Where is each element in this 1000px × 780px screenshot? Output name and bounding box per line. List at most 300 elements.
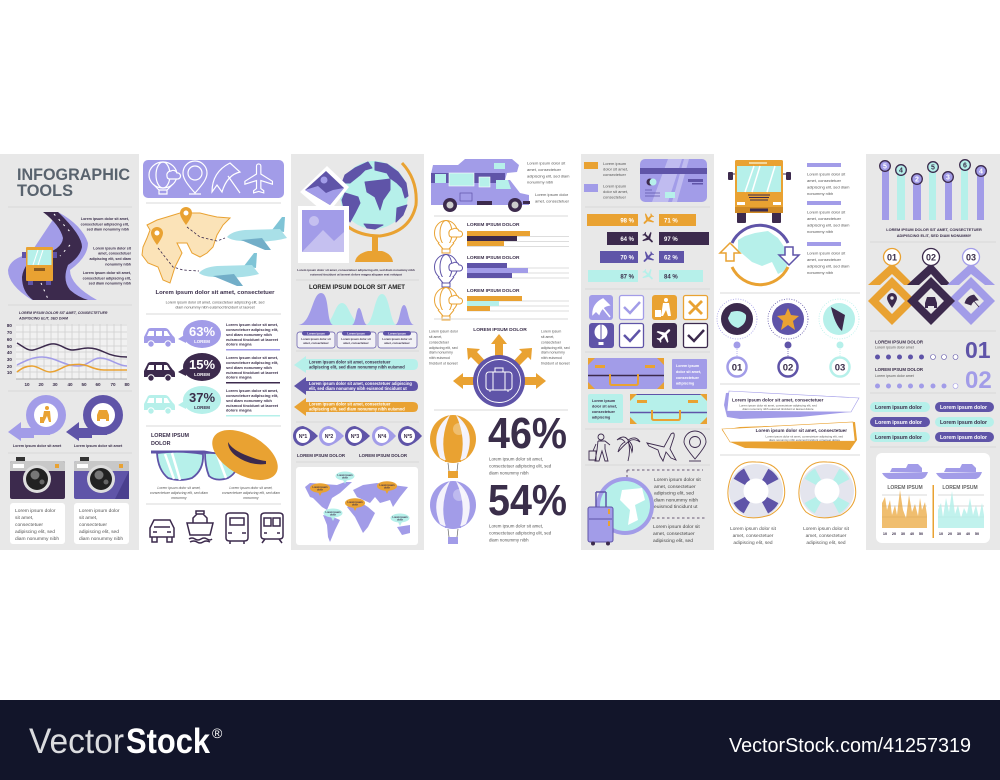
bus text: adipiscing elit, sed diam xyxy=(807,184,850,190)
card: ship charts: 30 xyxy=(957,532,961,536)
camper text: Lorem ipsum dolor sit xyxy=(527,160,566,166)
steps: numbered markers: Nº3 xyxy=(351,434,359,440)
map description: Lorem ipsum dolor sit amet, consectetuer adipiscing elit, sed xyxy=(166,300,264,304)
chart: line chart: 50 xyxy=(81,382,87,387)
row: 37 percent: LOREM xyxy=(194,405,210,410)
chart: line chart: 20 xyxy=(38,382,44,387)
progress 02: Lorem ipsum dolor amet xyxy=(875,374,914,378)
cards: peaks: amet, consectetuer xyxy=(303,341,330,345)
caption globe: euismod tincidunt ut laoreet dolore magna aliquam erat volutpat xyxy=(310,272,402,276)
icon: suitcase lavender xyxy=(588,358,664,389)
illustration: globe with cycle arrows xyxy=(720,225,799,285)
card: ship charts: 50 xyxy=(975,532,979,536)
illustration: sunglasses xyxy=(151,452,238,480)
pills: Lorem ipsum dolor xyxy=(875,405,922,411)
text box aqua xyxy=(588,394,623,423)
globe text: adipiscing elit, sed xyxy=(653,538,693,544)
camper text: nonummy nibh xyxy=(527,180,553,184)
map: world with callouts: Lorem ipsum xyxy=(379,484,395,487)
row: balloon bars 2: LOREM IPSUM DOLOR xyxy=(467,255,520,261)
side text left: sit amet, xyxy=(429,335,442,339)
map: world with callouts: dolor xyxy=(397,518,403,522)
card: ship charts: 50 xyxy=(919,532,923,536)
chart: line chart: 10 xyxy=(7,370,12,375)
row: 63 percent: LOREM xyxy=(194,339,210,344)
caption right: consectetuer adipiscing elit, sed diam xyxy=(222,491,280,495)
camper text: adipiscing elit, sed diam xyxy=(527,174,570,178)
legend: dolor sit amet, xyxy=(603,189,628,194)
footer band xyxy=(0,700,1000,780)
ribbon lavender: Lorem ipsum dolor sit amet, consectetuer adipiscing elit, sed xyxy=(739,404,817,408)
pills: Lorem ipsum dolor xyxy=(940,405,987,411)
lifebuoy text: Lorem ipsum dolor sit xyxy=(803,526,850,532)
icon tiles xyxy=(589,295,708,348)
side text right xyxy=(541,330,570,366)
caption right xyxy=(222,486,280,500)
panel: icon header xyxy=(143,160,284,198)
card: ship charts: 20 xyxy=(948,532,952,536)
row: balloon bars 3: LOREM IPSUM DOLOR xyxy=(467,288,520,294)
arrow: car xyxy=(66,395,123,448)
step 02: 02 xyxy=(783,362,793,374)
globe text: amet, consectetuer xyxy=(653,531,695,537)
icon: dark camera xyxy=(10,457,65,499)
bus text: amet, consectetuer xyxy=(807,178,842,183)
cards: peaks: Lorem ipsum dolor sit xyxy=(382,337,412,341)
chart: butterfly bars: 70 % xyxy=(620,256,635,262)
bus text: adipiscing elit, sed diam xyxy=(807,264,850,268)
steps: numbered markers: Nº2 xyxy=(325,434,333,440)
card: ship charts xyxy=(876,453,990,543)
arrow band aqua: adipiscing elit, sed diam nonummy nibh euismod xyxy=(309,364,405,370)
side text left: nibh euismod xyxy=(429,356,450,360)
map: world with callouts: Lorem ipsum xyxy=(392,516,408,519)
map: world with callouts: Lorem ipsum xyxy=(325,511,341,514)
road text blocks: adipiscing elit, sed diam xyxy=(89,257,131,261)
pills xyxy=(870,402,994,442)
chart: lollipop bars: 4 xyxy=(899,168,903,174)
row: 37 percent: sed diam nonummy nibh xyxy=(226,398,272,403)
lifebuoy text: amet, consectetuer xyxy=(806,533,847,539)
row: 37 percent: consectetuer adipiscing elit, xyxy=(226,393,278,398)
icon: lifebuoy purple xyxy=(728,462,785,518)
heading: luggage: LOREM IPSUM DOLOR xyxy=(473,327,527,333)
diagram: diamonds xyxy=(868,248,995,325)
pills: Lorem ipsum dolor xyxy=(940,435,987,441)
arrow: walker: Lorem ipsum dolor sit amet xyxy=(13,444,62,448)
footer band: ® xyxy=(212,725,223,741)
chart: butterfly bars: 64 % xyxy=(620,237,635,243)
row: 15 percent xyxy=(144,353,280,384)
text card right: consectetuer xyxy=(79,522,107,528)
heading: peaks: LOREM IPSUM DOLOR SIT AMET xyxy=(309,284,405,291)
globe text: euismod tincidunt ut xyxy=(654,504,698,510)
camper text: Lorem ipsum dolor xyxy=(535,192,569,197)
progress 01: Lorem ipsum dolor amet xyxy=(875,346,914,350)
row: balloon bars 1 xyxy=(434,220,569,253)
text box aqua: adipiscing xyxy=(592,416,610,420)
row: 15 percent: dolore magna xyxy=(226,374,252,380)
row: 37 percent xyxy=(144,386,280,416)
arrow band orange: adipiscing elit, sed diam nonummy nibh euismod xyxy=(309,406,405,412)
footer band: Vector xyxy=(29,722,124,761)
text card left: adipiscing elit, sed xyxy=(15,529,55,535)
card: ship charts: 10 xyxy=(883,532,887,536)
cards: peaks: amet, consectetuer xyxy=(343,341,370,345)
icon: plane upper xyxy=(227,217,287,250)
bus text: amet, consectetuer xyxy=(807,257,842,262)
text 46 percent: Lorem ipsum dolor sit amet, xyxy=(489,456,543,462)
cards: peaks: Lorem ipsum xyxy=(347,332,365,336)
text card right: Lorem ipsum dolor xyxy=(79,508,120,514)
text box aqua: consectetuer xyxy=(592,410,616,414)
globe text xyxy=(653,477,701,544)
road text blocks: sed diam nonummy nibh xyxy=(89,282,131,286)
camper text: amet, consectetuer xyxy=(535,198,570,204)
steps: numbered markers: Nº5 xyxy=(404,434,412,440)
progress 02: 02 xyxy=(965,367,992,394)
road text blocks: sed diam nonummy nibh xyxy=(87,228,129,232)
ribbon orange: diam nonummy nibh euismod tincidunt ut laoreet dolore xyxy=(769,438,840,442)
chart: line chart: 40 xyxy=(7,350,12,355)
progress 02 xyxy=(875,367,992,394)
chart: line chart: 30 xyxy=(7,357,12,362)
road text blocks: Lorem ipsum dolor sit amet, xyxy=(83,271,131,275)
text box aqua: dolor sit amet, xyxy=(592,404,617,408)
side text left xyxy=(429,330,459,366)
step 03 xyxy=(819,299,859,376)
lifebuoy text: adipiscing elit, sed xyxy=(806,540,846,546)
footer band: VectorStock.com/41257319 xyxy=(729,735,971,757)
steps: numbered markers: Nº4 xyxy=(378,434,386,440)
arrow band orange: Lorem ipsum dolor sit amet, consectetuer xyxy=(309,402,391,406)
icon: lifebuoy aqua xyxy=(799,462,856,518)
progress 02: LOREM IPSUM DOLOR xyxy=(875,367,924,372)
cards: peaks: Lorem ipsum xyxy=(388,332,406,336)
chart: butterfly bars: 71 % xyxy=(664,218,678,224)
camper text: amet, consectetuer xyxy=(527,167,562,172)
bus text: adipiscing elit, sed diam xyxy=(807,222,850,228)
side text right: nibh euismod xyxy=(541,356,562,360)
illustration: globe and luggage xyxy=(588,470,705,546)
ribbon orange: Lorem ipsum dolor sit amet, consectetuer adipiscing elit, sed xyxy=(766,434,843,438)
text card left: diam nonummy nibh xyxy=(15,536,59,542)
row: 37 percent: dolore magna xyxy=(226,408,252,412)
row: 37 percent: Lorem ipsum dolor sit amet, xyxy=(226,388,278,393)
panel: background strips xyxy=(0,154,1000,550)
chart: butterfly bars: 84 % xyxy=(664,274,678,280)
globe text: Lorem ipsum dolor sit xyxy=(654,477,701,483)
caption left: Lorem ipsum dolor sit amet, xyxy=(157,486,201,490)
chart: butterfly bars xyxy=(587,211,709,283)
row: 63 percent: 63% xyxy=(189,324,215,339)
steps: numbered markers: Nº1 xyxy=(299,434,307,440)
arrow band purple xyxy=(294,377,418,395)
chart: lollipop bars xyxy=(880,160,986,220)
illustration: globe on stand xyxy=(340,161,416,262)
lifebuoy text: adipiscing elit, sed xyxy=(733,540,773,546)
side text left: Lorem ipsum dolor xyxy=(429,330,459,334)
road text blocks: consectetuer adipiscing elit, xyxy=(81,222,129,226)
side text left: tincidunt ut laoreet xyxy=(429,362,458,366)
legend xyxy=(584,161,628,200)
text 54 percent: consectetuer adipiscing elit, sed xyxy=(489,530,552,536)
map: world with callouts: dolor xyxy=(317,488,323,492)
text 46 percent: diam nonummy nibh xyxy=(489,470,529,476)
map: world with callouts: dolor xyxy=(384,486,390,490)
ribbon lavender: diam nonummy nibh euismod tincidunt ut laoreet dolore xyxy=(742,407,814,411)
row: 63 percent: Lorem ipsum dolor sit amet, xyxy=(226,322,278,327)
illustration: photo tilted xyxy=(300,166,349,215)
row: 63 percent: sed diam nonummy nibh xyxy=(226,332,272,337)
progress 01 xyxy=(875,337,991,363)
caption left: consectetuer adipiscing elit, sed diam xyxy=(150,491,208,495)
number 46 percent: 46% xyxy=(488,409,567,458)
chart: line chart: 70 xyxy=(110,382,116,387)
arrow: car: Lorem ipsum dolor sit amet xyxy=(74,444,123,448)
row: 15 percent: 15% xyxy=(189,357,215,372)
card: ship charts: 40 xyxy=(966,532,970,536)
arrow band orange xyxy=(294,398,418,416)
step 01: 01 xyxy=(732,362,743,374)
steps: numbered markers: LOREM IPSUM DOLOR xyxy=(359,453,408,458)
cards: peaks: Lorem ipsum xyxy=(307,332,325,336)
number 54 percent: 54% xyxy=(488,476,567,525)
text 46 percent: consectetuer adipiscing elit, sed xyxy=(489,464,552,468)
cards: peaks: Lorem ipsum dolor sit xyxy=(301,337,331,341)
steps: numbered markers xyxy=(293,426,422,458)
illustration: bus front xyxy=(728,160,791,223)
icon: suitcase aqua xyxy=(630,394,707,424)
bars caption xyxy=(886,227,982,238)
illustration: photo front xyxy=(298,206,349,263)
text card left xyxy=(10,503,65,544)
bus text: nonummy nibh xyxy=(807,229,833,234)
row: 15 percent: consectetuer adipiscing elit, xyxy=(226,360,278,365)
chart: line chart: 60 xyxy=(95,382,101,387)
footer band: Stock xyxy=(126,722,210,761)
road text blocks: consectetuer adipiscing elit, xyxy=(83,276,131,280)
chart: lollipop bars: 5 xyxy=(883,164,887,170)
legend: Lorem ipsum xyxy=(603,184,627,188)
card: ship charts: 30 xyxy=(901,532,905,536)
card: ship charts: LOREM IPSUM xyxy=(942,485,978,491)
globe text: diam nonummy nibh xyxy=(654,498,698,504)
road text blocks: Lorem ipsum dolor sit amet, xyxy=(81,217,129,221)
diagram: diamonds: 02 xyxy=(926,252,936,262)
diagram: radial arrows and suitcase xyxy=(453,334,546,407)
icon: credit card xyxy=(640,159,707,202)
side text right: sit amet, xyxy=(541,335,554,339)
caption right: Lorem ipsum dolor sit amet, xyxy=(229,486,273,490)
legend: consectetuer xyxy=(603,194,627,200)
text box aqua: Lorem ipsum xyxy=(592,399,616,403)
heading: hat and glasses: DOLOR xyxy=(151,441,171,447)
card: ship charts: LOREM IPSUM xyxy=(887,485,923,491)
progress 01: 01 xyxy=(965,337,991,363)
text box lavender xyxy=(672,359,707,389)
chart: butterfly bars: 98 % xyxy=(620,218,635,224)
globe text: adipiscing elit, sed xyxy=(654,490,694,496)
icon: purple camera xyxy=(74,457,129,499)
map: world with callouts: Lorem ipsum xyxy=(347,501,363,504)
text card right xyxy=(74,503,129,544)
chart: line chart: 50 xyxy=(7,344,12,349)
caption left xyxy=(150,486,208,500)
map: world with callouts: Lorem ipsum xyxy=(312,486,328,489)
road text blocks: amet, consectetuer xyxy=(98,252,132,256)
row: 63 percent: euismod tincidunt ut laoreet xyxy=(226,337,279,342)
row: balloon bars 2 xyxy=(434,254,569,287)
side text left: consectetuer xyxy=(429,340,450,344)
globe text: Lorem ipsum dolor sit xyxy=(653,524,700,530)
side text right: Lorem ipsum xyxy=(541,330,561,334)
illustration: hat xyxy=(204,420,286,490)
globe text: amet, consectetuer xyxy=(654,484,696,490)
bars caption: ADIPISCING ELIT, SED DIAM NONUMMY xyxy=(897,233,972,238)
caption left: nonummy xyxy=(171,496,187,500)
text 46 percent xyxy=(489,456,552,476)
bus text: Lorem ipsum dolor sit xyxy=(807,172,846,176)
text card left: sit amet, xyxy=(15,515,33,521)
progress 01: LOREM IPSUM DOLOR xyxy=(875,340,924,344)
row: 15 percent: LOREM xyxy=(194,372,210,377)
steps: numbered markers: LOREM IPSUM DOLOR xyxy=(297,453,346,458)
heading: hat and glasses xyxy=(151,433,190,447)
map: Eurasia and Africa xyxy=(142,207,230,283)
bus text: amet, consectetuer xyxy=(807,216,842,221)
bus text: Lorem ipsum dolor sit xyxy=(807,210,846,214)
diagram: diamonds: 03 xyxy=(966,252,976,262)
map: world with callouts xyxy=(296,467,418,545)
chart: line chart: 20 xyxy=(7,364,12,369)
cards: peaks: Lorem ipsum dolor sit xyxy=(341,337,371,341)
chart: line chart: 70 xyxy=(7,330,12,335)
row: balloon bars 3 xyxy=(434,288,569,320)
text 54 percent: Lorem ipsum dolor sit amet, xyxy=(489,524,543,528)
chart: lollipop bars: 6 xyxy=(963,162,967,170)
map: world with callouts: dolor xyxy=(342,476,348,480)
illustration: camper van xyxy=(431,159,530,212)
text card left: Lorem ipsum dolor xyxy=(15,508,56,514)
chart: lollipop bars: 5 xyxy=(931,164,935,172)
bars caption: LOREM IPSUM DOLOR SIT AMET, CONSECTETUER xyxy=(886,227,982,232)
row: 63 percent: dolore magna xyxy=(226,342,252,346)
title: INFOGRAPHIC xyxy=(17,165,130,184)
card: ship charts: 40 xyxy=(910,532,914,536)
text card right: adipiscing elit, sed xyxy=(79,529,119,535)
chart: line chart: LOREM IPSUM DOLOR SIT AMET, CONSECTETUER xyxy=(19,311,108,315)
map: world with callouts: dolor xyxy=(352,504,358,506)
arrow band purple: Lorem ipsum dolor sit amet, consectetuer adipiscing xyxy=(309,381,412,386)
step 03: 03 xyxy=(835,362,845,374)
text 54 percent: diam nonummy nibh xyxy=(489,538,529,542)
chart: butterfly bars: 87 % xyxy=(620,274,635,280)
pills: Lorem ipsum dolor xyxy=(875,420,922,426)
title xyxy=(17,165,130,200)
icons: travel outlines xyxy=(589,431,706,461)
step 01 xyxy=(717,299,757,376)
caption right: nonummy xyxy=(243,496,259,500)
lifebuoy text: Lorem ipsum dolor sit xyxy=(730,526,777,532)
bus text: Lorem ipsum dolor sit xyxy=(807,250,846,256)
legend: Lorem ipsum xyxy=(603,161,627,166)
chart: line chart: ADIPISCING ELIT, SED DIAM xyxy=(18,316,69,320)
ribbon lavender xyxy=(724,391,859,419)
bus text: nonummy nibh xyxy=(807,270,833,275)
text box lavender: consectetuer xyxy=(676,376,700,380)
diagram: diamonds: 01 xyxy=(887,252,897,262)
arrow band aqua xyxy=(294,356,418,373)
heading: hat and glasses: LOREM IPSUM xyxy=(151,433,190,439)
side text right: tincidunt ut laoreet xyxy=(541,362,570,366)
side text right: diam nonummy xyxy=(541,350,565,354)
caption globe: Lorem ipsum dolor sit amet, consectetuer adipiscing elit, sed diam nonummy nibh xyxy=(297,268,415,272)
row: 15 percent: Lorem ipsum dolor sit amet, xyxy=(226,355,278,360)
map: world with callouts: Lorem ipsum xyxy=(337,474,353,477)
text box lavender: Lorem ipsum xyxy=(676,364,700,368)
map description xyxy=(166,300,264,310)
caption globe xyxy=(297,268,415,276)
chart: lollipop bars: 4 xyxy=(979,168,983,176)
chart: line chart: 80 xyxy=(7,323,12,328)
cards: peaks: amet, consectetuer xyxy=(384,341,411,345)
row: 37 percent: 37% xyxy=(189,390,215,405)
text 54 percent xyxy=(489,524,552,542)
map heading: Lorem ipsum dolor sit amet, consectetuer xyxy=(156,290,275,296)
step 02 xyxy=(768,299,808,376)
side text right: consectetuer xyxy=(541,340,562,344)
text card right: sit amet, xyxy=(79,515,97,521)
cards: peaks xyxy=(297,331,417,348)
chart: line chart: 10 xyxy=(24,382,30,387)
side text left: diam nonummy xyxy=(429,350,453,354)
legend: consectetuer xyxy=(603,172,627,177)
side text left: adipiscing elit, sed xyxy=(429,346,458,350)
chart: line chart: 30 xyxy=(52,382,58,387)
icons: transport row xyxy=(150,511,283,544)
balloon 46 percent xyxy=(430,415,476,478)
legend: dolor sit amet, xyxy=(603,166,628,172)
row: 63 percent xyxy=(144,320,280,350)
row: 15 percent: euismod tincidunt ut laoreet xyxy=(226,370,279,375)
pills: Lorem ipsum dolor xyxy=(940,420,987,426)
chart: butterfly bars: 62 % xyxy=(664,256,678,262)
chart: butterfly bars: 97 % xyxy=(664,237,678,243)
icon: ships xyxy=(882,464,982,479)
road text blocks: nonummy nibh xyxy=(105,262,131,266)
road text blocks xyxy=(81,217,132,286)
title: TOOLS xyxy=(17,181,73,200)
text card left: consectetuer xyxy=(15,522,43,528)
ribbon lavender: Lorem ipsum dolor sit amet, consectetuer xyxy=(732,398,824,402)
text box lavender: adipiscing xyxy=(676,382,694,386)
map: world with callouts: dolor xyxy=(330,514,336,516)
lifebuoy text: amet, consectetuer xyxy=(733,533,774,539)
chart: lollipop bars: 3 xyxy=(946,174,950,182)
ribbon orange: Lorem ipsum dolor sit amet, consectetuer xyxy=(756,428,847,433)
text box lavender: dolor sit amet, xyxy=(676,370,701,374)
arrow: walker xyxy=(8,395,66,448)
chart: line chart xyxy=(7,311,130,387)
card: ship charts: 10 xyxy=(939,532,943,536)
row: balloon bars 1: LOREM IPSUM DOLOR xyxy=(467,222,520,228)
bus text: nonummy nibh xyxy=(807,191,833,196)
chart: line chart: 60 xyxy=(7,337,12,342)
row: 63 percent: consectetuer adipiscing elit, xyxy=(226,327,278,332)
bus text xyxy=(807,163,850,275)
camper text xyxy=(527,160,570,204)
